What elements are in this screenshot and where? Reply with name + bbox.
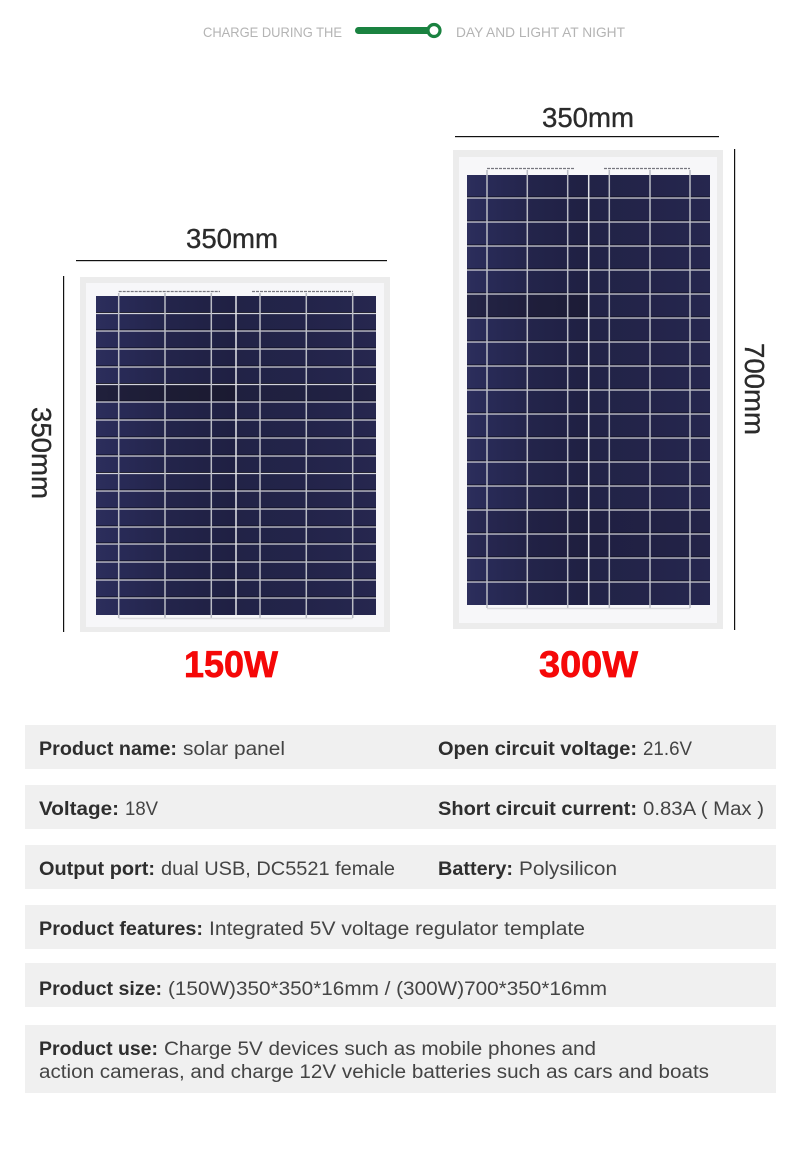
spec row: output port and battery: Battery:: [438, 859, 513, 880]
label: 300W: 300W: [539, 644, 638, 685]
header slogan with switch: [203, 24, 625, 40]
spec row: voltage and short circuit current: Short circuit current:: [438, 799, 637, 820]
300W height dimension: 700mm: [739, 343, 770, 435]
spec row: voltage and short circuit current: 0.83A ( Max ): [643, 799, 764, 820]
spec row: output port and battery: [25, 845, 776, 889]
header slogan with switch: CHARGE DURING THE: [203, 24, 342, 40]
spec row: voltage and short circuit current: Voltage:: [39, 799, 119, 820]
solar panel: 150W: [80, 277, 390, 632]
spec row: product use: Charge 5V devices such as mobile phones and: [164, 1039, 596, 1060]
spec row: product use: action cameras, and charge 12V vehicle batteries such as cars and boats: [39, 1062, 709, 1083]
spec row: product name and open circuit voltage: Product name:: [39, 739, 177, 760]
spec row: output port and battery: Polysilicon: [519, 859, 617, 880]
spec row: product size: (150W)350*350*16mm / (300W)700*350*16mm: [168, 979, 607, 1000]
spec row: product name and open circuit voltage: Open circuit voltage:: [438, 739, 637, 760]
spec row: product size: Product size:: [39, 979, 162, 1000]
spec row: voltage and short circuit current: 18V: [125, 799, 158, 820]
spec row: product name and open circuit voltage: 21.6V: [643, 739, 692, 760]
icon: green toggle switch: [355, 24, 440, 36]
spec row: product name and open circuit voltage: [25, 725, 776, 769]
spec row: voltage and short circuit current: [25, 785, 776, 829]
solar panel: 300W: [453, 150, 723, 629]
header slogan with switch: DAY AND LIGHT AT NIGHT: [456, 24, 625, 40]
spec row: product features: Integrated 5V voltage regulator template: [209, 919, 585, 940]
spec row: output port and battery: Output port:: [39, 859, 155, 880]
150W width dimension: 350mm: [186, 223, 278, 254]
label: 150W: 150W: [184, 644, 278, 685]
150W height dimension: 350mm: [26, 407, 57, 499]
spec row: product use: Product use:: [39, 1039, 158, 1060]
300W width dimension: 350mm: [542, 102, 634, 133]
spec row: output port and battery: dual USB, DC5521 female: [161, 859, 395, 880]
spec row: product features: [25, 905, 776, 949]
spec row: product size: [25, 963, 776, 1007]
spec row: product use: [25, 1025, 776, 1093]
spec row: product features: Product features:: [39, 919, 203, 940]
spec row: product name and open circuit voltage: solar panel: [183, 739, 285, 760]
